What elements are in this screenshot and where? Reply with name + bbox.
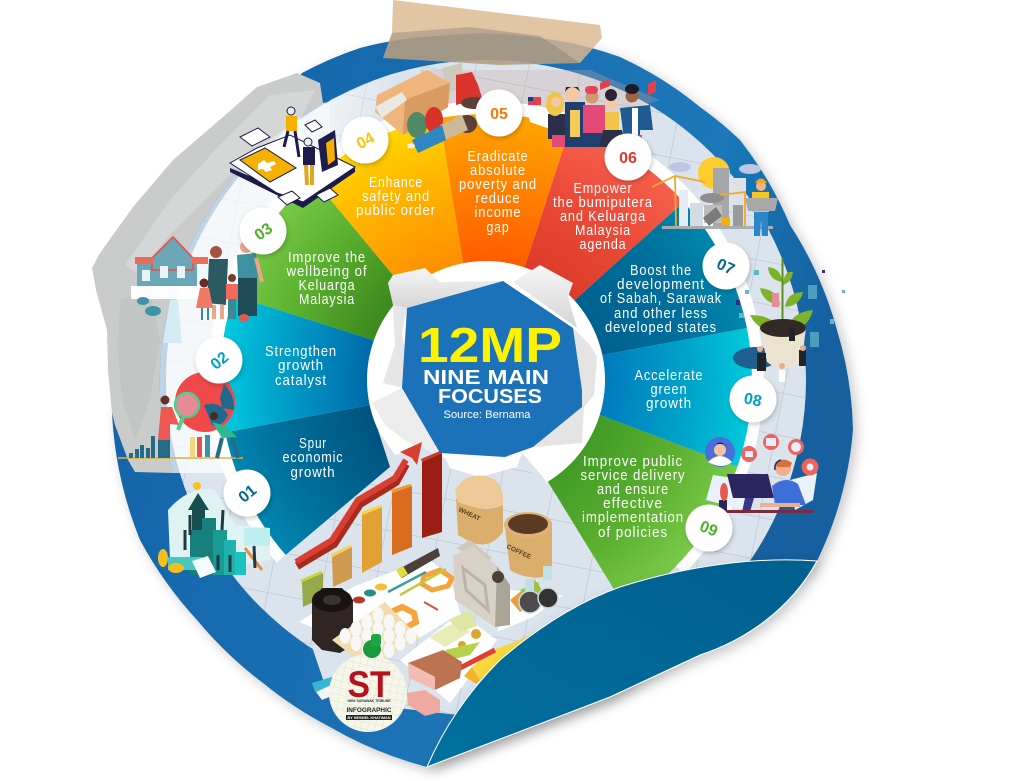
text: focus 5: income [474, 205, 522, 221]
wheel of nine coloured segments [224, 114, 752, 589]
torn flap top left [388, 268, 503, 308]
text: focus 7: development [617, 277, 705, 293]
segment 06 [524, 147, 679, 300]
meat block [408, 650, 462, 690]
yellow panel [240, 148, 296, 182]
mother [207, 246, 228, 319]
text: focus 4: Enhance [369, 175, 423, 191]
marker 04: 04 [354, 130, 378, 153]
bushes [137, 297, 161, 316]
flasks [519, 566, 558, 613]
text: focus 6: agenda [580, 237, 626, 253]
marker 02: 02 [208, 349, 232, 373]
tape strips [312, 676, 346, 700]
white fence [131, 286, 203, 299]
hub title [418, 319, 562, 421]
text: focus 1 [282, 436, 344, 481]
text: focus 3: wellbeing of [286, 264, 368, 280]
text: focus 7: developed states [605, 320, 717, 336]
adhesive tape at the top [383, 0, 602, 65]
pen tip [396, 566, 408, 578]
bar 5 [421, 451, 442, 538]
wheat sack [455, 476, 503, 544]
trash can [442, 63, 464, 92]
ladder and team members [185, 510, 262, 572]
marker 07 [702, 242, 750, 290]
light chart panel [244, 528, 270, 546]
text: focus 9: Improve public [583, 454, 683, 470]
sun [698, 157, 730, 189]
bar 3 [361, 505, 382, 573]
cranes [652, 176, 745, 226]
son [226, 274, 238, 319]
white arm and flag left [527, 97, 553, 130]
text: focus 8: growth [646, 396, 692, 412]
text: focus 9: of policies [598, 525, 668, 541]
platform [230, 167, 355, 208]
cardboard box [375, 70, 450, 135]
text: focus 5: reduce [476, 191, 520, 207]
text: focus 1: economic [282, 450, 344, 466]
illustration 09: customer service agent [705, 434, 818, 513]
buildings [679, 168, 746, 227]
text: focus 9: service delivery [580, 468, 686, 484]
icon centres [745, 438, 814, 470]
subheading focuses: FOCUSES [438, 385, 542, 408]
segment 02 [224, 299, 374, 432]
rising red arrow [296, 442, 422, 566]
text: focus 7: and other less [614, 306, 708, 322]
arrow tower [188, 493, 209, 545]
illustration: commodities and charts [296, 442, 565, 716]
torn strip lower left [372, 388, 440, 453]
data fragments [736, 270, 845, 347]
guard figure 1 [284, 107, 299, 157]
marker 03: 03 [252, 220, 276, 244]
text: focus 4: public order [356, 203, 436, 219]
stairs [190, 518, 246, 575]
illustration 08: plant growth with people [733, 258, 845, 382]
marker 05 [476, 90, 522, 136]
side plinths [240, 120, 338, 205]
text: focus 3 [286, 250, 368, 308]
marker 04 [342, 116, 388, 164]
daughter [196, 278, 213, 320]
coffee sack: COFFEE [505, 543, 533, 561]
logo letters: ST [348, 664, 391, 705]
segment 05 [442, 114, 564, 268]
bar 2 [331, 545, 352, 587]
woman in hijab [546, 92, 573, 147]
numbered markers [196, 90, 776, 552]
researcher in red coat [158, 396, 179, 458]
house [135, 237, 208, 287]
marker 09 [686, 504, 732, 552]
illustration 05: homeless people [375, 63, 487, 153]
outer blue paper disc [112, 34, 853, 767]
text: focus 9: implementation [582, 510, 684, 526]
garden path [163, 300, 182, 343]
dust and truck [700, 193, 730, 226]
marker 06 [604, 134, 652, 180]
text: focus 2: growth [278, 358, 324, 374]
text: focus 4: safety and [362, 189, 430, 205]
white document sheets [299, 558, 563, 703]
black octagon cylinder [312, 588, 353, 653]
marker 06: 06 [619, 150, 637, 167]
illustration 06: Malaysian people with flags [527, 79, 656, 147]
magnifier [175, 393, 199, 430]
text: focus 6 [553, 181, 653, 253]
researcher in green [210, 412, 238, 458]
red bag [425, 107, 443, 133]
illustration 04: security platform [230, 107, 355, 208]
service icons [741, 434, 818, 476]
man with yellow shirt [565, 87, 585, 147]
text: focus 7: of Sabah, Sarawak [600, 291, 722, 307]
light wings [706, 473, 817, 510]
woman caller avatar [705, 437, 735, 467]
bar chart [129, 436, 155, 458]
text: focus 6: the bumiputera [553, 195, 653, 211]
illustration 07: city construction [652, 157, 778, 236]
text: focus 6: Malaysia [575, 223, 631, 239]
torn flap top right [513, 265, 577, 328]
text: focus 8: green [650, 382, 688, 398]
central hub with torn paper [367, 261, 605, 499]
infographic label: INFOGRAPHIC [346, 707, 392, 714]
invoice [192, 556, 216, 578]
base platform [662, 226, 773, 229]
coffee sack [504, 512, 552, 578]
green block [520, 582, 542, 600]
blue ground ellipse [733, 347, 777, 369]
meat slice [407, 690, 440, 716]
source line: Source: Bernama [444, 409, 531, 421]
small people [757, 293, 806, 382]
badge disc [329, 654, 407, 732]
segment 08 [600, 328, 752, 467]
text: focus 5: Eradicate [468, 149, 528, 165]
whitened upper-left paper area [160, 102, 330, 473]
text: focus 5: poverty and [459, 177, 537, 193]
text: focus 1: growth [290, 465, 336, 481]
worker with blueprint [745, 178, 778, 236]
continents [204, 384, 234, 426]
red globe [175, 372, 235, 432]
segment 04 [330, 128, 464, 275]
text: focus 7 [600, 263, 722, 336]
desk [712, 510, 813, 513]
white outer ring of the wheel [215, 108, 757, 569]
torn strip right [533, 328, 597, 447]
clouds [669, 162, 761, 174]
text: focus 7: Boost the [630, 263, 692, 279]
text: focus 2: Strengthen [265, 344, 337, 360]
text: focus 9 [580, 454, 686, 541]
dog [239, 314, 249, 322]
cross mark [258, 160, 276, 172]
lightbulb [193, 482, 201, 490]
segment 09 [548, 415, 738, 589]
whitened paper fading to the right [330, 70, 400, 250]
platform top [230, 135, 355, 202]
pot [760, 319, 806, 369]
sheet and base [168, 557, 202, 570]
paper grid in lower cut [282, 467, 610, 720]
agent [760, 459, 806, 507]
segment 01 [226, 405, 390, 555]
pencils [388, 569, 446, 595]
torn strip left [383, 305, 407, 388]
byline bar: BY HESMEL KHATIMAN [348, 715, 391, 720]
egg tray [332, 602, 420, 668]
flags raised [600, 79, 656, 95]
torn grey paper on the left edge [92, 73, 323, 473]
marker 01: 01 [236, 482, 260, 506]
tower [318, 130, 338, 172]
paper showing through the lower cut [282, 430, 610, 720]
marker 07: 07 [714, 256, 737, 279]
ground [118, 457, 243, 459]
test tubes [190, 435, 210, 457]
highlighter pen [397, 548, 440, 578]
marker 09: 09 [697, 518, 720, 541]
bar 1 [300, 571, 323, 607]
text: focus 9: and ensure [597, 482, 669, 498]
woman with dark skirt [599, 89, 626, 147]
light paper with grid [166, 60, 806, 700]
plant leaves [750, 258, 813, 336]
father [237, 241, 262, 316]
text: focus 3: Malaysia [299, 292, 355, 308]
bar 4 [391, 484, 412, 555]
text: focus 5: gap [486, 220, 510, 236]
text: focus 5 [459, 149, 537, 236]
monitor stand [742, 498, 754, 512]
text: focus 6: and Keluarga [560, 209, 646, 225]
publisher badge [312, 634, 407, 732]
text: focus 6: Empower [574, 181, 632, 197]
marker 08: 08 [742, 390, 763, 411]
segment 03 [252, 198, 394, 340]
potted plant [719, 483, 728, 510]
marker 03 [240, 208, 286, 254]
butter and colour blocks [445, 618, 565, 684]
guard figure 2 [303, 138, 315, 185]
wheat sack: WHEAT [457, 506, 481, 523]
segment 07 [574, 206, 747, 355]
green pin [363, 634, 381, 658]
colour block chart [510, 580, 545, 612]
text: focus 3: Keluarga [298, 278, 356, 294]
man with pink shirt [583, 86, 605, 147]
marker 08 [730, 376, 776, 422]
text: focus 3: Improve the [288, 250, 366, 266]
blue centre panel [402, 281, 582, 457]
green backpack [407, 112, 427, 138]
lying person [407, 115, 477, 153]
marker 02 [196, 336, 242, 384]
infographic dots and rings [353, 570, 452, 629]
text: focus 9: effective [603, 496, 663, 512]
subheading nine main: NINE MAIN [423, 366, 549, 389]
money stacks [429, 610, 481, 649]
illustration 03: family and house [131, 237, 262, 343]
jerrycan [453, 540, 510, 627]
text: focus 5: absolute [470, 163, 526, 179]
text: focus 2: catalyst [275, 373, 327, 389]
text: focus 2 [265, 344, 337, 389]
monitor [727, 474, 774, 498]
tinted paper under tape [420, 70, 660, 130]
man in blue jacket [620, 84, 653, 147]
marker 05: 05 [490, 106, 508, 123]
newspaper name: NEW SARAWAK TRIBUNE [348, 698, 391, 703]
sitting person in red [456, 72, 487, 109]
text: focus 4 [356, 175, 436, 219]
text: focus 1: Spur [299, 436, 327, 452]
illustration 02: globe research [118, 372, 243, 458]
marker 01 [224, 470, 270, 516]
mint backdrop [168, 489, 270, 570]
coins [158, 549, 184, 573]
text: focus 8: Accelerate [634, 368, 704, 384]
heading 12MP: 12MP [418, 319, 562, 373]
illustration 01: staircase team [158, 482, 270, 578]
folded page corner [427, 560, 817, 767]
text: focus 8 [634, 368, 704, 412]
